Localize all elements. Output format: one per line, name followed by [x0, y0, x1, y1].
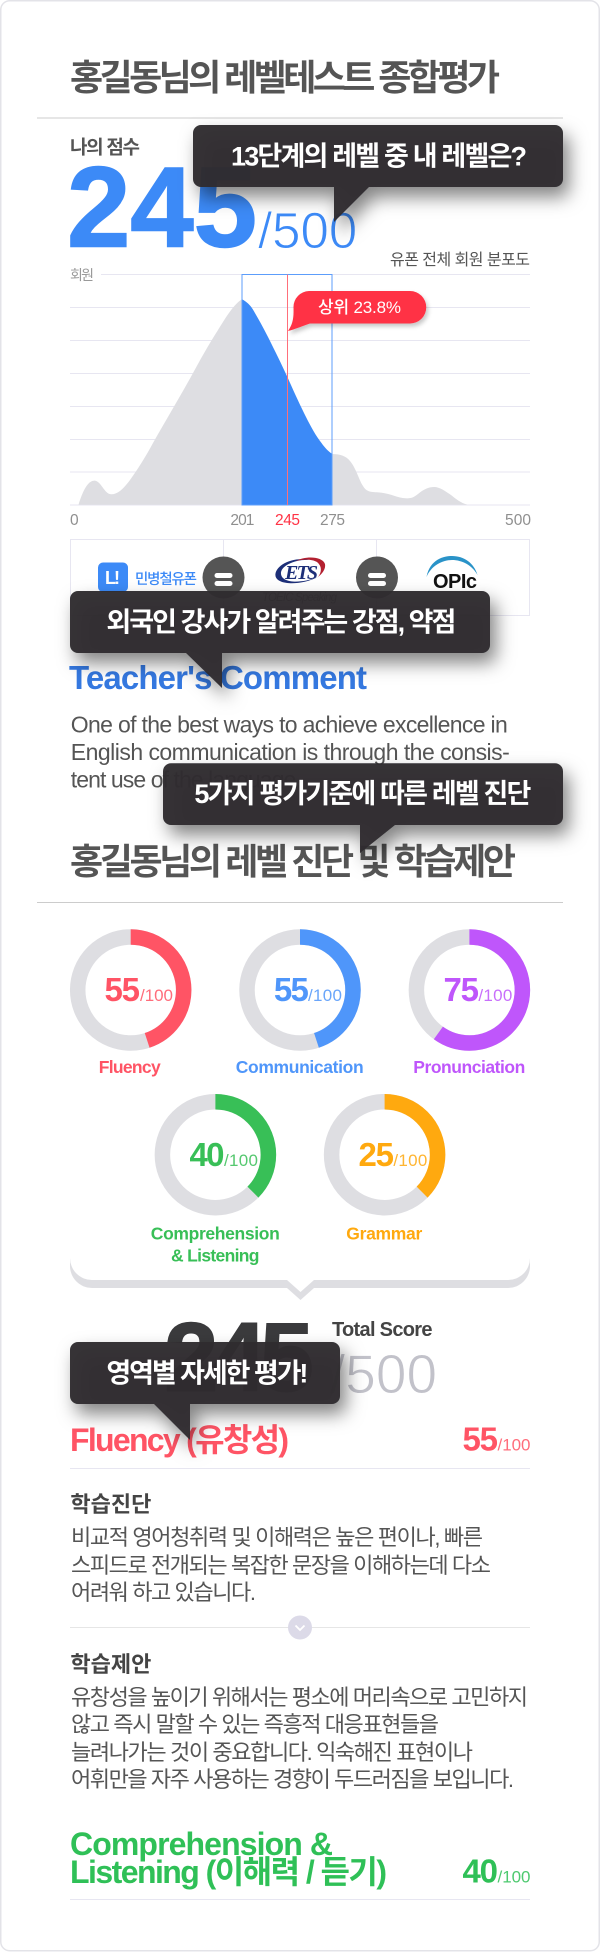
tooltip: strengths and weaknesses: [70, 591, 490, 688]
fluency section header: Fluency (유창성): [70, 1422, 289, 1458]
donut card bottom with pointer: [70, 1250, 530, 1300]
tooltip: level among 13: 13단계의 레벨 중 내 레벨은?: [231, 142, 527, 172]
comprehension section header: Comprehension &: [70, 1826, 333, 1862]
my score label: 나의 점수: [70, 136, 140, 158]
equivalence logo panel: [70, 540, 530, 616]
total score denominator: /500: [330, 1343, 437, 1405]
donut: fluency: Fluency: [99, 1057, 161, 1077]
comprehension section header: /100: [498, 1868, 530, 1887]
score range frame: [242, 274, 332, 505]
logo: OPIc: [426, 556, 478, 593]
diagnosis body: [71, 1525, 491, 1605]
donut: grammar: 25: [358, 1136, 394, 1173]
logo: OPIc: OPIc: [433, 571, 477, 593]
donut: comprehension and listening: 40: [190, 1136, 224, 1173]
y axis label: 회원: [70, 267, 94, 283]
my score number: 245: [67, 144, 257, 272]
donut: comprehension and listening: Comprehension: [151, 1223, 280, 1243]
suggestion body: 늘려나가는 것이 중요합니다. 익숙해진 표현이나: [71, 1740, 473, 1765]
donut: communication: Communication: [236, 1057, 364, 1077]
logo: ETS: TOEIC Speaking: [262, 592, 338, 604]
title: overall evaluation: 홍길동님의 레벨테스트 종합평가: [70, 57, 500, 98]
fluency section header: /100: [498, 1436, 530, 1455]
logo: ETS: [262, 558, 338, 604]
teacher's comment body: English communication is through the consis-: [71, 739, 510, 765]
donut: pronunciation: 75: [444, 971, 479, 1008]
suggestion body: 유창성을 높이기 위해서는 평소에 머리속으로 고민하지: [71, 1685, 528, 1710]
distribution chart: [70, 267, 531, 529]
callout: top percent: 상위 23.8%: [318, 298, 401, 317]
donut: comprehension and listening: /100: [224, 1151, 258, 1170]
distribution chart caption: 유폰 전체 회원 분포도: [390, 251, 530, 269]
donut: pronunciation: [413, 937, 525, 1077]
my score block: [67, 136, 357, 272]
suggestion body: 어휘만을 자주 사용하는 경향이 두드러짐을 보입니다.: [71, 1767, 514, 1792]
icon: expand chevron: [288, 1616, 312, 1640]
diagnosis body: 어려워 하고 있습니다.: [71, 1580, 256, 1605]
title: level diagnosis: 홍길동님의 레벨 진단 및 학습제안: [70, 841, 516, 882]
diagnosis body: 스피드로 전개되는 복잡한 문장을 이해하는데 다소: [71, 1553, 491, 1578]
equals icon: [202, 556, 244, 598]
fluency section header: [70, 1421, 530, 1458]
axis labels: 0: [70, 512, 79, 529]
my score denominator: /500: [258, 202, 357, 259]
axis labels: 275: [320, 512, 345, 529]
tooltip: five criteria: [163, 763, 563, 853]
logo: ETS: ETS: [284, 562, 318, 584]
comprehension section header: Listening (이해력 / 듣기): [70, 1854, 387, 1890]
donut: fluency: 55: [104, 971, 140, 1008]
tooltip: five criteria: 5가지 평가기준에 따른 레벨 진단: [194, 779, 532, 809]
axis labels: 201: [230, 512, 254, 529]
callout: top percent: [288, 291, 426, 331]
tooltip: level among 13: [193, 125, 563, 222]
diagnosis heading: 학습진단: [70, 1492, 151, 1517]
suggestion body: 않고 즉시 말할 수 있는 즉흥적 대응표현들을: [71, 1712, 439, 1737]
diagnosis body: 비교적 영어청취력 및 이해력은 높은 편이나, 빠른: [71, 1525, 483, 1550]
total score: [164, 1302, 437, 1412]
teacher's comment body: One of the best ways to achieve excellence in: [71, 712, 508, 738]
my score marker line: [287, 274, 288, 505]
axis labels: 500: [505, 512, 531, 529]
area: left distribution: [78, 299, 242, 505]
fluency section header: 55: [462, 1421, 498, 1458]
donut: communication: [236, 937, 364, 1077]
donut: comprehension and listening: [151, 1102, 280, 1266]
donut: grammar: /100: [393, 1151, 427, 1170]
teacher's comment body: [71, 712, 510, 793]
area: right distribution: [332, 454, 467, 505]
logo: Minbyeongcheol Upon: [98, 562, 197, 592]
logo: Minbyeongcheol Upon: 민병철유폰: [135, 571, 197, 588]
donut: fluency: /100: [140, 986, 173, 1005]
axis labels: 245: [275, 512, 300, 529]
comprehension section header: 40: [462, 1853, 498, 1890]
equals icon: [356, 556, 398, 598]
area: score range highlight: [242, 299, 332, 505]
donut: communication: 55: [274, 971, 309, 1008]
donut: grammar: [332, 1102, 438, 1243]
total score label: Total Score: [332, 1319, 432, 1341]
tooltip: detailed evaluation: [70, 1342, 340, 1440]
teacher's comment body: tent use of the language.: [71, 767, 302, 793]
donut: communication: /100: [308, 986, 342, 1005]
axis labels: [70, 512, 531, 529]
donut: grammar: Grammar: [346, 1223, 422, 1243]
total score number: 245: [164, 1302, 314, 1412]
logo: Minbyeongcheol Upon: L!: [105, 568, 120, 588]
donut: fluency: [78, 937, 184, 1077]
suggestion body: [71, 1685, 528, 1792]
suggestion heading: 학습제안: [70, 1652, 151, 1677]
donut: pronunciation: /100: [478, 986, 512, 1005]
tooltip: detailed evaluation: 영역별 자세한 평가!: [106, 1358, 308, 1388]
comprehension section header: [70, 1826, 530, 1890]
teacher's comment heading: Teacher's Comment: [69, 659, 367, 696]
donut: pronunciation: Pronunciation: [413, 1057, 525, 1077]
tooltip: strengths and weaknesses: 외국인 강사가 알려주는 강점, 약점: [106, 607, 456, 637]
donut: comprehension and listening: & Listening: [171, 1246, 260, 1266]
